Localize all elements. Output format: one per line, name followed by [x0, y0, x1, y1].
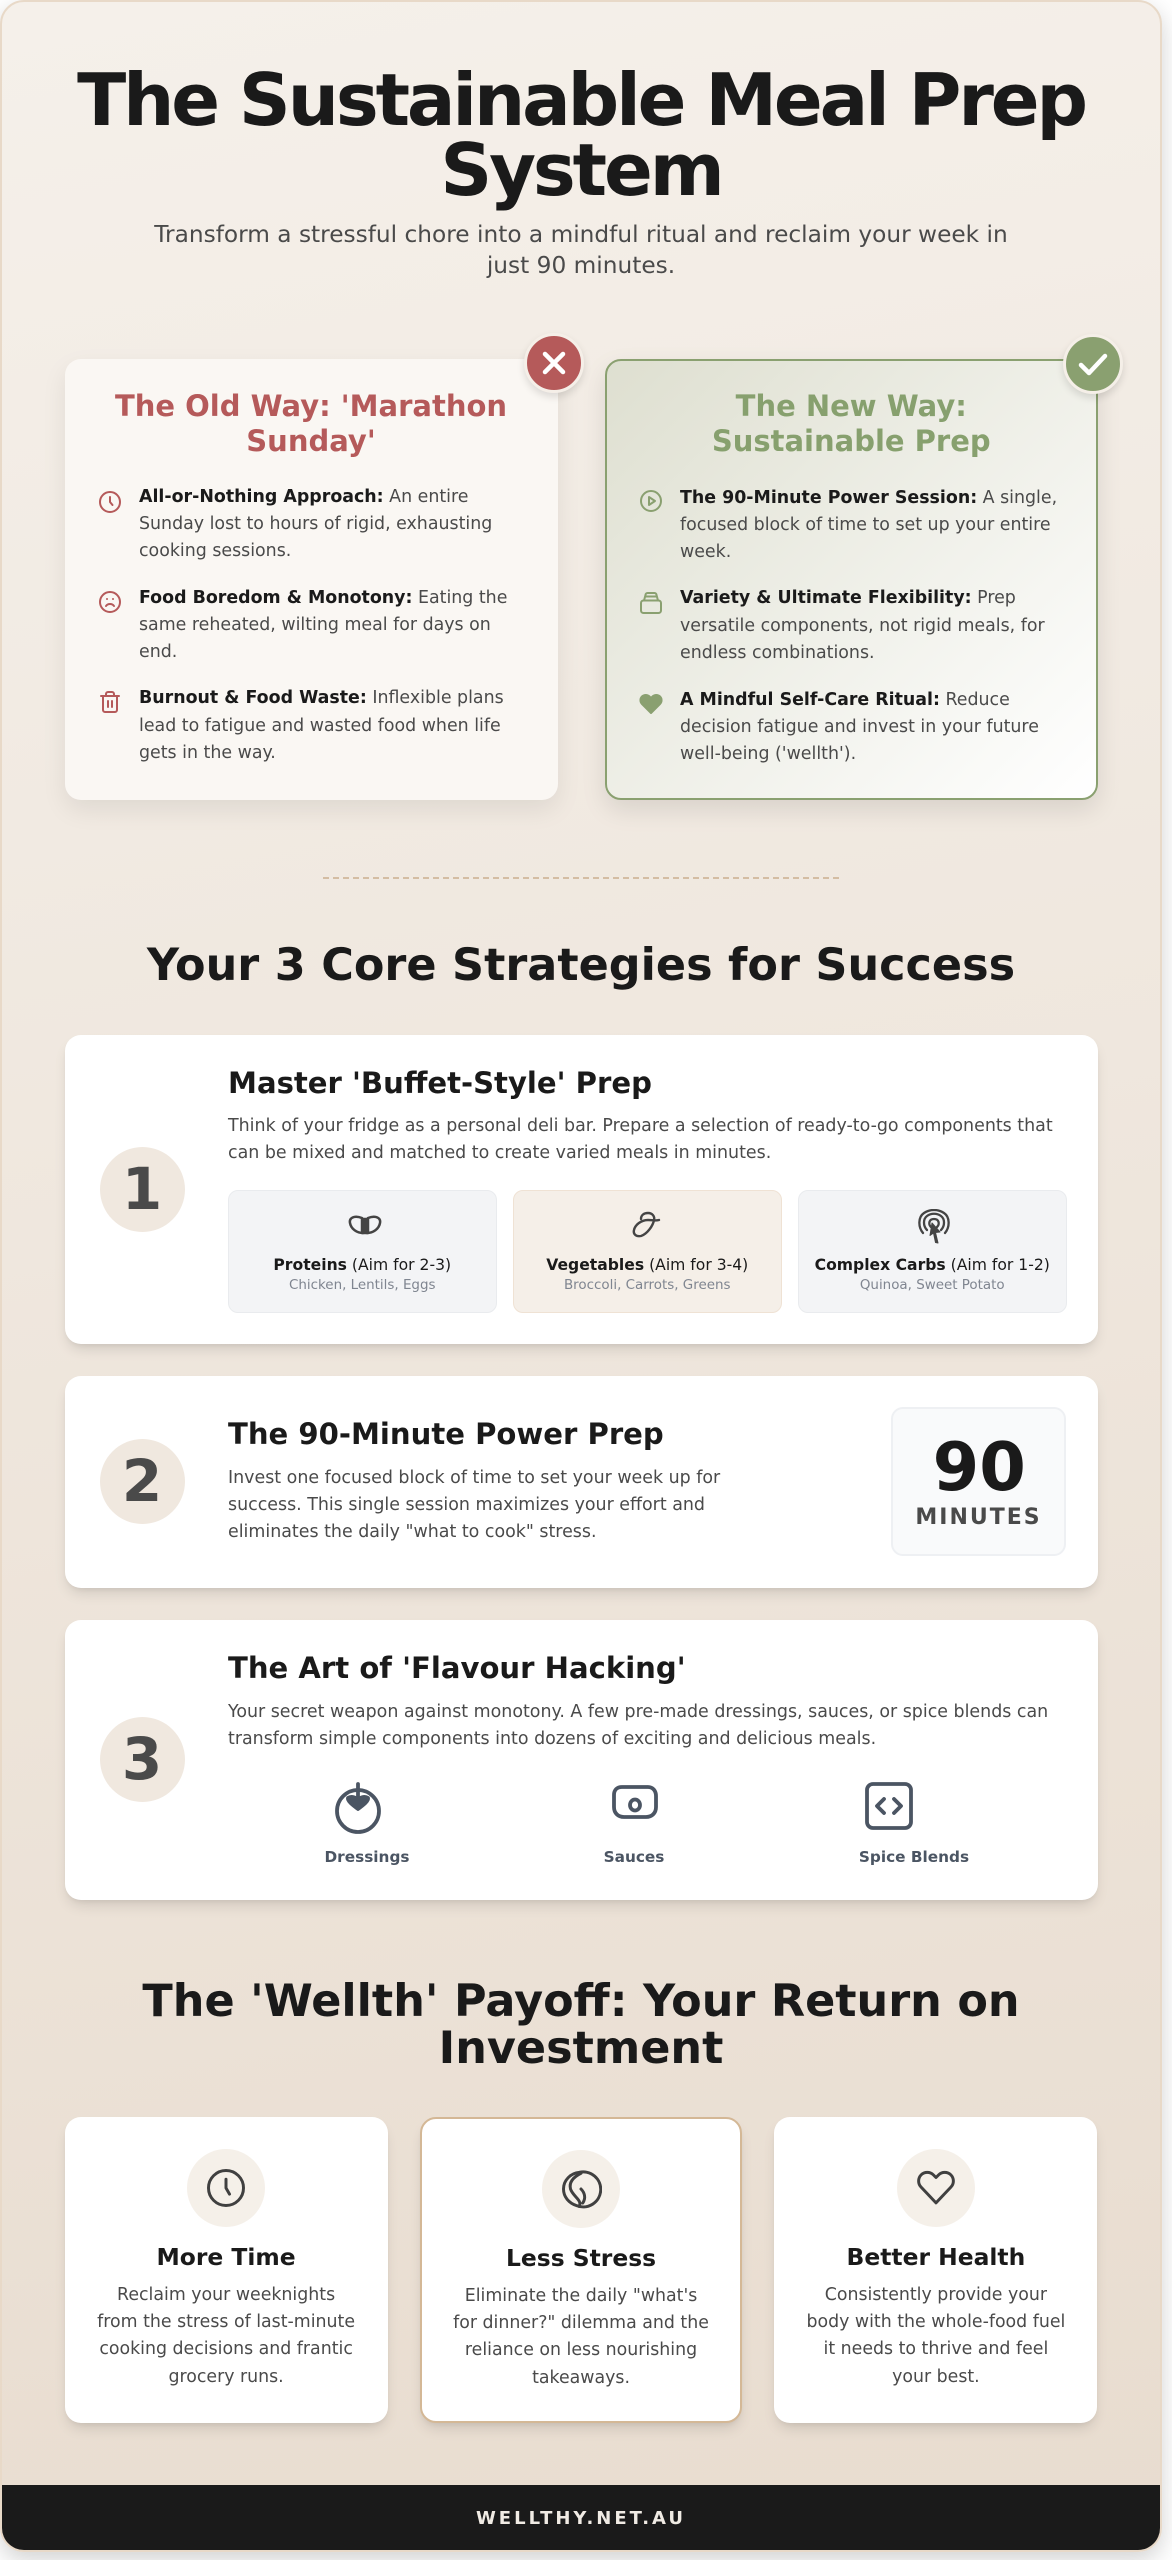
- step number 3: 3: [122, 1725, 162, 1793]
- subtitle: just 90 minutes.: [487, 252, 675, 279]
- strategy 2 heading: The 90-Minute Power Prep: [228, 1416, 664, 1450]
- text: more time: [97, 2285, 355, 2386]
- panel: less stress: [420, 2117, 742, 2423]
- text: more time: Reclaim your weeknights: [117, 2285, 335, 2305]
- heading: new way: The New Way:: [736, 389, 967, 423]
- heading: wellth payoff: [142, 1976, 1020, 2074]
- badge: check: [1063, 334, 1123, 394]
- stat number: 90: [933, 1428, 1026, 1506]
- strategy 1 text: [228, 1116, 1053, 1163]
- text: less stress: Eliminate the daily "what's: [465, 2286, 697, 2306]
- heading: new way: Sustainable Prep: [712, 424, 991, 458]
- subtitle: Transform a stressful chore into a mindful ritual and reclaim your week in: [154, 221, 1008, 248]
- strategy 2 text: Invest one focused block of time to set your week up for: [228, 1468, 720, 1488]
- panel: more time: [64, 2117, 388, 2423]
- item: food boredom: Food Boredom & Monotony: Eating the: [139, 588, 507, 608]
- icon: container: [640, 592, 662, 614]
- heading: more time: More Time: [157, 2243, 296, 2271]
- heading: old way: The Old Way: 'Marathon: [115, 388, 507, 422]
- strategy 3 text: [228, 1702, 1048, 1749]
- title: The Sustainable Meal Prep: [77, 58, 1085, 142]
- item: variety: Variety & Ultimate Flexibility: Prep: [680, 588, 1016, 608]
- label: spice blends: Spice Blends: [859, 1848, 969, 1866]
- text: less stress: takeaways.: [532, 2368, 630, 2388]
- panel: strategy 3: [64, 1620, 1098, 1900]
- icon: spice blends: [865, 1782, 913, 1830]
- label: sauces: Sauces: [604, 1848, 664, 1866]
- card: vegetables: [512, 1190, 782, 1313]
- label: vegetables: Vegetables (Aim for 3-4): [546, 1256, 748, 1274]
- panel: strategy 2: [64, 1376, 1098, 1588]
- subtitle: [154, 221, 1008, 279]
- icon circle: heart: [897, 2149, 975, 2227]
- examples: complex carbs: Quinoa, Sweet Potato: [860, 1278, 1005, 1292]
- text: better health: Consistently provide your: [825, 2285, 1047, 2305]
- strategy 3 text: Your secret weapon against monotony. A few pre-made dressings, sauces, or spice blends can: [228, 1702, 1048, 1722]
- item: burnout: Burnout & Food Waste: Inflexible plans: [139, 688, 504, 708]
- item: power session: week.: [680, 542, 731, 562]
- item: self-care: decision fatigue and invest in your future: [680, 717, 1039, 737]
- heading: old way: [115, 388, 507, 458]
- icon: complex carbs: [918, 1209, 950, 1244]
- item: all-or-nothing: All-or-Nothing Approach: An entire: [139, 487, 468, 507]
- text: better health: [806, 2285, 1065, 2386]
- card: complex carbs: [798, 1190, 1067, 1313]
- item: all-or-nothing: [139, 487, 492, 561]
- text: more time: cooking decisions and frantic: [99, 2339, 353, 2359]
- item: all-or-nothing: Sunday lost to hours of rigid, exhausting: [139, 514, 492, 534]
- icon: dressings: [335, 1782, 381, 1834]
- item: food boredom: [139, 588, 507, 662]
- strategy 3 heading: The Art of 'Flavour Hacking': [228, 1650, 686, 1684]
- heading: less stress: Less Stress: [506, 2244, 656, 2272]
- examples: proteins: Chicken, Lentils, Eggs: [289, 1278, 436, 1292]
- icon circle: clock: [187, 2149, 265, 2227]
- icon: frown: [99, 591, 121, 613]
- icon: sauces: [612, 1785, 658, 1819]
- label: dressings: Dressings: [324, 1848, 410, 1866]
- label: complex carbs: Complex Carbs (Aim for 1-2): [815, 1256, 1050, 1274]
- item: burnout: gets in the way.: [139, 743, 276, 763]
- item: self-care: A Mindful Self-Care Ritual: Reduce: [680, 690, 1010, 710]
- step number 2: [100, 1439, 184, 1524]
- step number 1: 1: [122, 1155, 162, 1223]
- item: variety: endless combinations.: [680, 643, 875, 663]
- item: burnout: [139, 688, 504, 763]
- text: better health: your best.: [892, 2366, 980, 2386]
- step number 2: 2: [122, 1447, 162, 1515]
- panel: strategy 1: [64, 1035, 1098, 1344]
- strategy 3 text: transform simple components into dozens of exciting and delicious meals.: [228, 1729, 876, 1749]
- icon circle: leaf: [542, 2150, 620, 2228]
- heading: new way: [712, 389, 991, 458]
- item: all-or-nothing: cooking sessions.: [139, 541, 291, 561]
- footer: WELLTHY.NET.AU: [476, 2508, 686, 2529]
- item: burnout: lead to fatigue and wasted food when life: [139, 716, 501, 736]
- heading: core strategies: Your 3 Core Strategies for Success: [147, 940, 1015, 990]
- item: variety: [680, 588, 1045, 663]
- item: power session: The 90-Minute Power Session: A single,: [680, 488, 1057, 508]
- strategy 1 heading: Master 'Buffet-Style' Prep: [228, 1066, 652, 1100]
- item: variety: versatile components, not rigid meals, for: [680, 616, 1045, 636]
- stat unit: MINUTES: [915, 1504, 1042, 1530]
- divider: [323, 877, 839, 879]
- panel: the new way: [604, 359, 1098, 800]
- item: food boredom: same reheated, wilting meal for days on: [139, 615, 491, 635]
- panel: the old way: [64, 359, 558, 800]
- title: [77, 58, 1085, 212]
- item: self-care: well-being ('wellth').: [680, 744, 856, 764]
- item: self-care: [680, 690, 1039, 764]
- heading: better health: Better Health: [847, 2243, 1025, 2271]
- icon: heart: [639, 694, 663, 714]
- step number 1: [100, 1147, 184, 1232]
- text: less stress: reliance on less nourishing: [465, 2340, 697, 2360]
- text: more time: from the stress of last-minute: [97, 2312, 355, 2332]
- heading: wellth payoff: The 'Wellth' Payoff: Your Return on: [142, 1976, 1020, 2027]
- icon: vegetables: [632, 1212, 660, 1238]
- heading: old way: Sunday': [246, 424, 376, 458]
- icon: clock: [99, 491, 121, 513]
- strategy 1 text: Think of your fridge as a personal deli bar. Prepare a selection of ready-to-go components that: [228, 1116, 1053, 1136]
- stat box: 90 minutes: [891, 1407, 1066, 1556]
- strategy 2 text: success. This single session maximizes your effort and: [228, 1495, 705, 1515]
- text: less stress: for dinner?" dilemma and the: [453, 2313, 709, 2333]
- text: more time: grocery runs.: [168, 2366, 284, 2386]
- badge: cross: [524, 333, 584, 393]
- label: proteins: Proteins (Aim for 2-3): [273, 1256, 451, 1274]
- item: power session: focused block of time to set up your entire: [680, 515, 1051, 535]
- item: power session: [680, 488, 1057, 562]
- panel: better health: [774, 2117, 1097, 2423]
- examples: vegetables: Broccoli, Carrots, Greens: [564, 1278, 731, 1292]
- strategy 2 text: eliminates the daily "what to cook" stress.: [228, 1522, 596, 1542]
- title: System: [440, 128, 722, 212]
- footer: [2, 2485, 1160, 2550]
- heading: wellth payoff: Investment: [439, 2023, 723, 2074]
- icon: play: [640, 490, 662, 512]
- strategy 1 text: can be mixed and matched to create varied meals in minutes.: [228, 1143, 771, 1163]
- card: proteins: [228, 1190, 497, 1313]
- text: less stress: [453, 2286, 709, 2388]
- text: better health: it needs to thrive and feel: [824, 2339, 1048, 2359]
- text: better health: body with the whole-food fuel: [806, 2312, 1065, 2332]
- icon: proteins: [348, 1216, 382, 1234]
- item: food boredom: end.: [139, 642, 177, 662]
- step number 3: [100, 1717, 184, 1802]
- icon: trash: [100, 691, 120, 713]
- strategy 2 text: [228, 1468, 720, 1542]
